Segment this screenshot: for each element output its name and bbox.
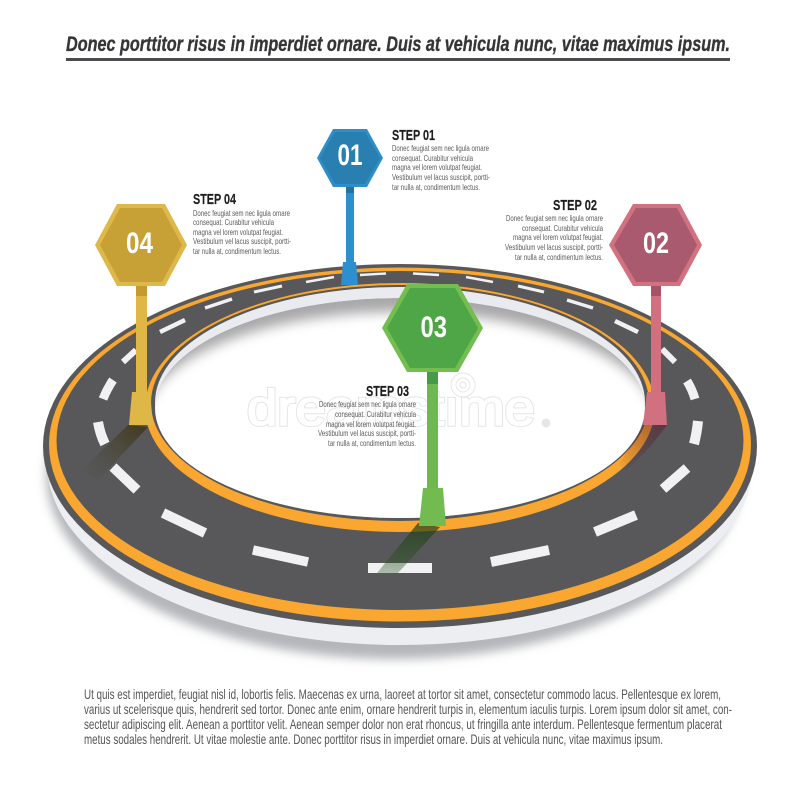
sign 02 [609,204,702,472]
step 02 text: consequat. Curabitur vehicula [522,223,603,233]
sign 04: 04 [126,227,153,260]
step 04 text: magna vel lorem volutpat feugiat. [193,227,283,237]
step 03 text: Vestibulum vel lacus suscipit, portti- [318,428,416,438]
road drop shadow [46,291,742,659]
step 03 text: magna vel lorem volutpat feugiat. [326,419,416,429]
step 02 text: magna vel lorem volutpat feugiat. [513,232,603,242]
centre dashes [98,274,698,568]
step 03 text: tar nulla at, condimentum lectus. [328,438,416,448]
step 03 text: Donec feugiat sem nec ligula ornare [319,399,416,409]
asphalt between lines [56,271,744,610]
inner orange line [145,283,655,532]
step 01 text: magna vel lorem volutpat feugiat. [392,162,482,172]
step 03 text: STEP 03 [366,383,409,400]
circular road [43,264,757,659]
watermark: dreamstıme [247,380,535,436]
step 01 text [392,127,490,192]
shadow [82,425,148,480]
hole interior with shadow [155,298,645,518]
outer orange line [49,268,751,622]
watermark: dreamstıme [247,380,535,436]
step 03 text [318,383,416,448]
sign 01 [317,129,383,285]
step 02 text: Donec feugiat sem nec ligula ornare [506,213,603,223]
step 04 text: Donec feugiat sem nec ligula ornare [193,208,290,218]
step 02 text: Vestibulum vel lacus suscipit, portti- [505,242,603,252]
asphalt surface [43,264,757,628]
step 01 text: STEP 01 [392,127,435,144]
step 01 text: Vestibulum vel lacus suscipit, portti- [392,172,490,182]
step 04 text: STEP 04 [193,191,236,208]
sign 02: 02 [643,227,669,260]
sign 04 [82,204,187,480]
step 01 text: tar nulla at, condimentum lectus. [392,182,480,192]
shadow [377,523,440,573]
inner asphalt edge [151,285,649,521]
step 04 text [193,191,291,256]
inner wall of the hole [155,287,645,518]
step 04 text: consequat. Curabitur vehicula [193,217,274,227]
sign 03 [377,284,483,573]
step 04 text: tar nulla at, condimentum lectus. [193,246,281,256]
footer paragraph [84,687,732,747]
step 01 text: Donec feugiat sem nec ligula ornare [392,143,489,153]
step 02 text: tar nulla at, condimentum lectus. [515,252,603,262]
step 03 text: consequat. Curabitur vehicula [335,409,416,419]
step 02 text: STEP 02 [553,197,597,214]
road side wall [47,281,753,645]
step 02 text [505,197,603,262]
sign 03: 03 [420,311,447,344]
shadow [619,425,667,472]
step 01 text: consequat. Curabitur vehicula [392,153,473,163]
sign 01: 01 [338,139,362,172]
step 04 text: Vestibulum vel lacus suscipit, portti- [193,236,291,246]
